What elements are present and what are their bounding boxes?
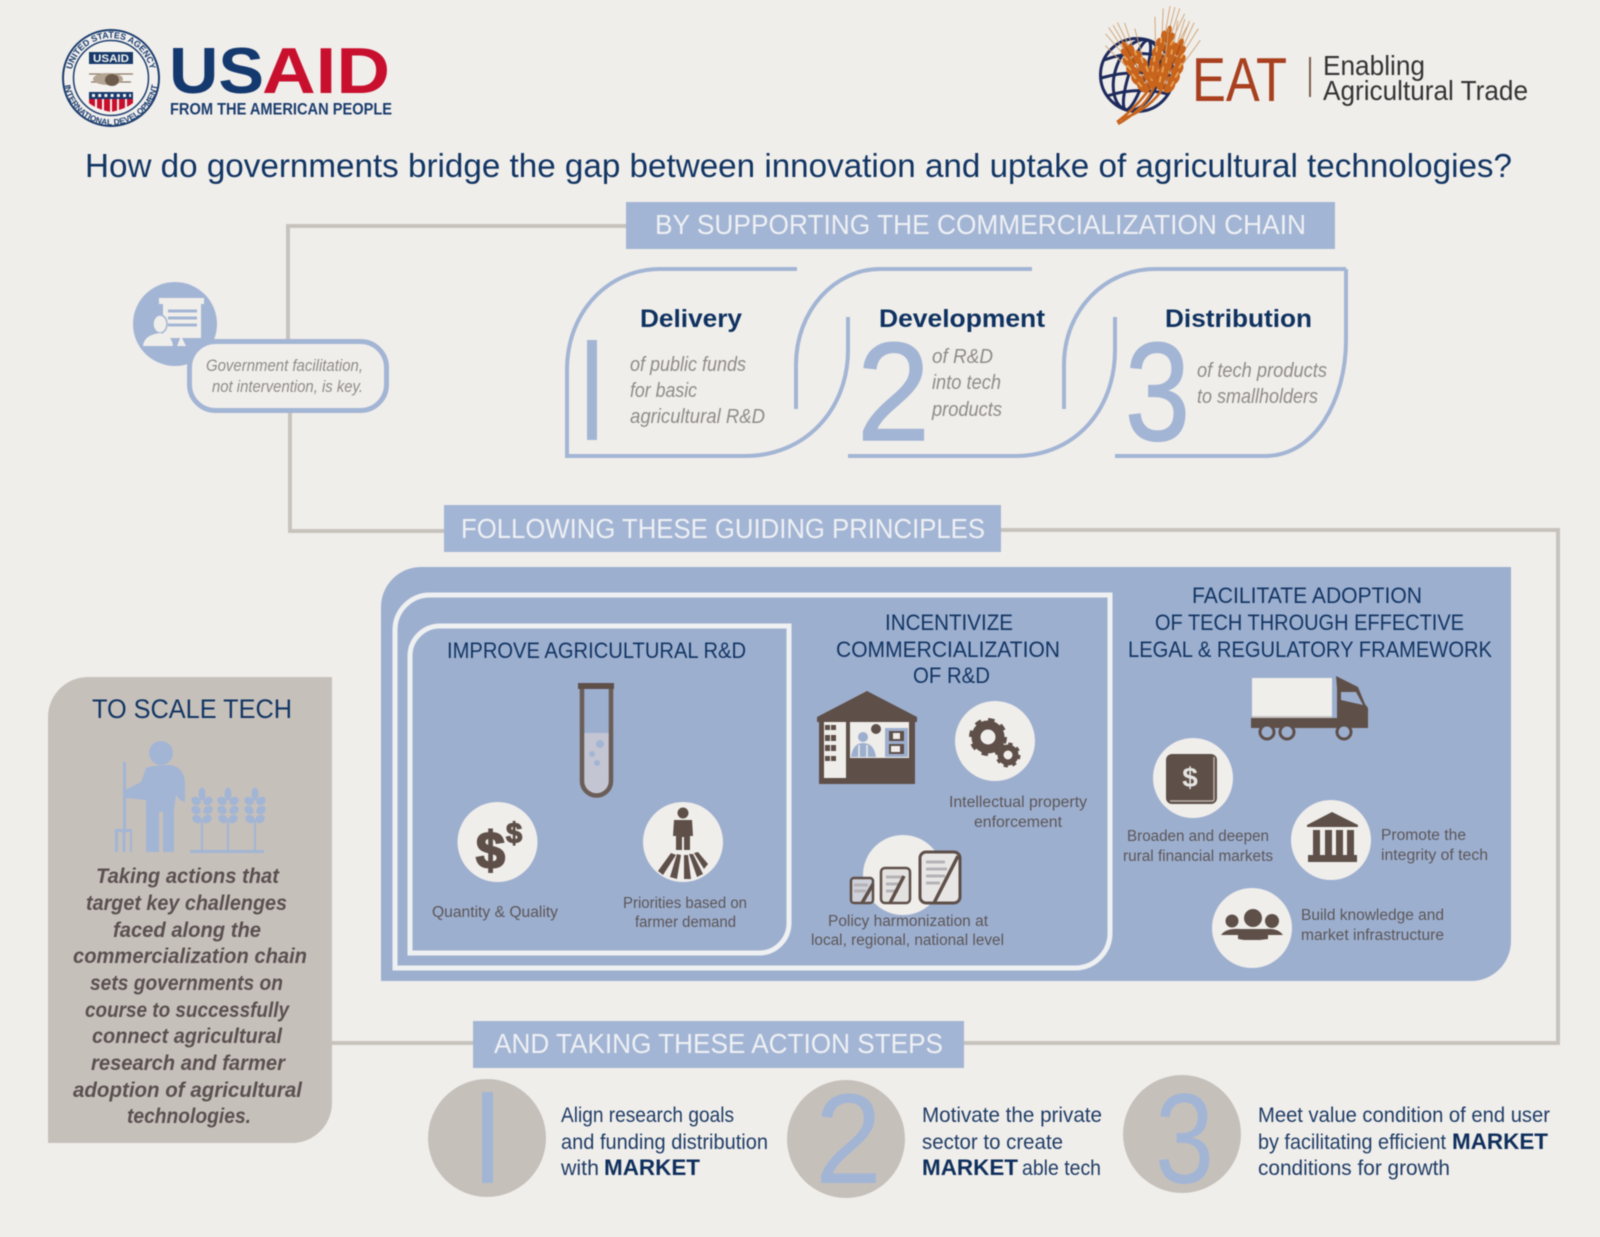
text: step 1: [560, 1104, 768, 1180]
icon: test tube: [578, 683, 614, 796]
heading: to scale tech: TO SCALE TECH: [92, 694, 292, 724]
action step 1: [428, 1078, 768, 1198]
text: scaling summary: [73, 865, 307, 1128]
section banner: guiding principles: FOLLOWING THESE GUIDING PRINCIPLES: [461, 513, 985, 544]
numeral 2: 2: [815, 1068, 882, 1211]
EAT logo: [1098, 3, 1528, 124]
icon: institution building: [1291, 800, 1371, 880]
callout: government facilitation: Government facilitation,: [206, 356, 363, 375]
caption: priorities: farmer demand: [635, 914, 736, 931]
caption: knowledge and market infrastructure: [1301, 907, 1444, 944]
text: step 2: Motivate the private: [922, 1104, 1102, 1127]
heading: improve agricultural R&D: IMPROVE AGRICULTURAL R&D: [447, 638, 746, 663]
text: step 1: Align research goals: [561, 1104, 734, 1127]
text: scaling summary: adoption of agricultural: [73, 1079, 303, 1102]
logo wordmark: AID: [262, 34, 390, 107]
logo wordmark: US: [169, 34, 264, 107]
heading: distribution: Distribution: [1165, 305, 1312, 333]
panel: development: [796, 269, 1115, 470]
text: step 1: with: [560, 1157, 599, 1180]
section banner: commercialization chain: BY SUPPORTING THE COMMERCIALIZATION CHAIN: [655, 209, 1306, 240]
text: development description: [931, 346, 1002, 421]
panel: to scale tech: [48, 677, 332, 1143]
text: distribution description: [1197, 360, 1327, 408]
text: development description: products: [931, 399, 1002, 421]
caption: integrity of tech: integrity of tech: [1381, 847, 1488, 864]
text: delivery description: for basic: [630, 380, 697, 402]
heading: incentivize commercialization: COMMERCIALIZATION: [836, 637, 1060, 662]
icon: dollar signs: $: [476, 822, 505, 880]
icon: farmer with pitchfork and crops: [115, 741, 267, 853]
text: delivery description: of public funds: [630, 354, 746, 376]
text: step 1: MARKET: [604, 1155, 701, 1180]
heading: facilitate adoption: FACILITATE ADOPTION: [1192, 583, 1422, 608]
icon: USAID seal: [61, 28, 161, 128]
numeral 2: 2: [857, 313, 930, 470]
numeral 1: 1: [544, 296, 636, 480]
caption: knowledge and market infrastructure: market infrastructure: [1301, 927, 1444, 944]
text: step 2: MARKET: [922, 1155, 1019, 1180]
icon: dollar book: $: [1182, 762, 1198, 793]
text: scaling summary: technologies.: [127, 1105, 251, 1128]
section banner: guiding principles: [444, 505, 1001, 552]
caption: knowledge and market infrastructure: Build knowledge and: [1301, 907, 1444, 924]
action step 2: [787, 1068, 1102, 1211]
icon: USAID seal: INTERNATIONAL DEVELOPMENT: [64, 84, 158, 126]
heading: delivery: Delivery: [640, 305, 742, 333]
text: step 3: conditions for growth: [1258, 1157, 1450, 1180]
text: scaling summary: connect agricultural: [92, 1025, 283, 1048]
panel: distribution: [1064, 269, 1346, 470]
text: scaling summary: course to successfully: [85, 999, 290, 1022]
icon: dollar book: [1153, 738, 1233, 818]
text: step 3: by facilitating efficient: [1258, 1131, 1446, 1154]
icon: truck: [1251, 676, 1368, 739]
caption: integrity of tech: [1381, 827, 1488, 864]
heading: incentivize commercialization: [836, 610, 1060, 688]
text: distribution description: of tech products: [1197, 360, 1327, 382]
section banner: action steps: AND TAKING THESE ACTION STEPS: [494, 1028, 943, 1059]
caption: quantity and quality: Quantity & Quality: [432, 904, 558, 921]
icon: presenter at board: [133, 282, 217, 366]
icon: person on radiating paths: [643, 802, 723, 882]
icon: policy documents: [851, 835, 960, 915]
text: scaling summary: commercialization chain: [73, 945, 307, 968]
title: How do governments bridge the gap between innovation and uptake of agricultural technologies?: [85, 147, 1512, 184]
text: step 1: and funding distribution: [561, 1131, 768, 1154]
icon: gears: [955, 701, 1035, 781]
caption: policy harmonization: [811, 913, 1004, 949]
text: scaling summary: Taking actions that: [96, 865, 280, 888]
caption: intellectual property: enforcement: [974, 814, 1063, 831]
text: delivery description: agricultural R&D: [630, 406, 765, 428]
text: step 2: able tech: [1022, 1157, 1101, 1180]
heading: incentivize commercialization: OF R&D: [913, 663, 990, 688]
EAT full name: [1323, 50, 1528, 106]
heading: development: Development: [879, 305, 1046, 333]
caption: intellectual property: [949, 794, 1087, 831]
panel: guiding principles: [381, 567, 1511, 981]
icon: group of people: [1212, 888, 1292, 968]
icon: market stall: [817, 691, 917, 784]
text: step 3: MARKET: [1452, 1129, 1549, 1154]
text: step 3: [1258, 1104, 1550, 1180]
text: scaling summary: target key challenges: [86, 892, 287, 915]
callout: government facilitation: [133, 282, 386, 410]
heading: facilitate adoption: [1128, 583, 1492, 662]
text: step 2: sector to create: [922, 1131, 1063, 1154]
caption: rural financial markets: Broaden and deepen: [1127, 828, 1269, 845]
numeral 1: 1: [443, 1052, 526, 1220]
icon: globe with wheat: [1098, 3, 1205, 124]
numeral 3: 3: [1125, 313, 1190, 470]
text: step 3: Meet value condition of end user: [1258, 1104, 1550, 1127]
caption: policy harmonization: Policy harmonization at: [828, 913, 989, 930]
connector lines: [288, 226, 1558, 1043]
EAT wordmark: EAT: [1192, 46, 1287, 115]
heading: facilitate adoption: OF TECH THROUGH EFFECTIVE: [1155, 610, 1464, 635]
text: step 2: [922, 1104, 1102, 1180]
logo wordmark: [169, 34, 390, 107]
USAID logo: [61, 28, 392, 128]
section banner: action steps: [473, 1021, 964, 1068]
text: development description: of R&D: [932, 346, 993, 368]
icon: USAID seal: USAID: [93, 53, 129, 65]
icon: USAID seal: UNITED STATES AGENCY: [66, 30, 156, 70]
heading: facilitate adoption: LEGAL & REGULATORY FRAMEWORK: [1128, 637, 1492, 662]
EAT full name: Agricultural Trade: [1323, 75, 1528, 106]
callout: government facilitation: not intervention, is key.: [212, 377, 363, 396]
text: delivery description: [630, 354, 765, 428]
text: scaling summary: sets governments on: [90, 972, 283, 995]
EAT full name: Enabling: [1323, 50, 1425, 81]
icon: dollar signs: [458, 802, 538, 882]
caption: intellectual property: Intellectual property: [949, 794, 1087, 811]
section banner: commercialization chain: [626, 202, 1335, 249]
text: scaling summary: research and farmer: [91, 1052, 287, 1075]
caption: rural financial markets: [1123, 828, 1273, 865]
caption: policy harmonization: local, regional, national level: [811, 932, 1004, 949]
action step 3: [1123, 1068, 1550, 1211]
text: distribution description: to smallholders: [1197, 386, 1318, 408]
heading: incentivize commercialization: INCENTIVIZE: [885, 610, 1013, 635]
caption: priorities: [623, 895, 747, 931]
caption: priorities: Priorities based on: [623, 895, 747, 912]
icon: dollar signs: $: [506, 818, 522, 850]
text: scaling summary: faced along the: [113, 919, 261, 942]
caption: rural financial markets: rural financial markets: [1123, 848, 1273, 865]
numeral 3: 3: [1155, 1068, 1214, 1211]
panel: delivery: [564, 266, 850, 458]
tagline: FROM THE AMERICAN PEOPLE: [170, 100, 392, 118]
text: development description: into tech: [932, 372, 1001, 394]
caption: integrity of tech: Promote the: [1381, 827, 1466, 844]
